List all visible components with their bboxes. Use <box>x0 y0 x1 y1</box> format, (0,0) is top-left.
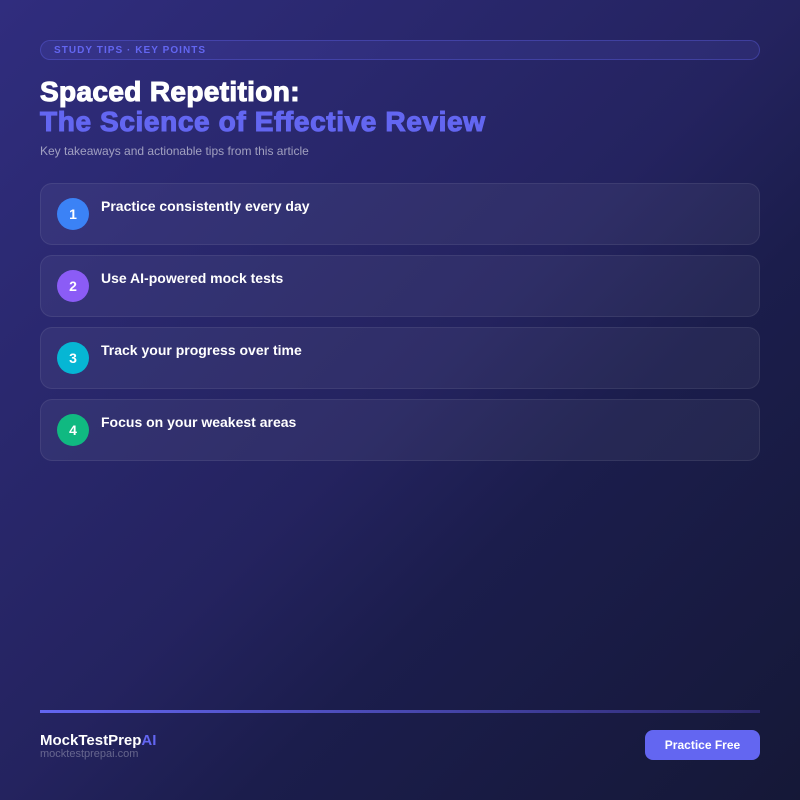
badge: study tips key points <box>40 40 760 60</box>
tip 3 text: Track your progress over time <box>101 342 302 358</box>
icon: number 2 <box>57 270 89 302</box>
button: practice free <box>645 730 760 760</box>
badge: study tips key points: STUDY TIPS · KEY POINTS <box>54 45 206 56</box>
icon: number 4: 4 <box>69 422 77 438</box>
panel: tip 4 <box>40 399 760 461</box>
brand name: MockTestPrepAI <box>40 732 156 749</box>
panel: tip 2 <box>40 255 760 317</box>
panel: tip 3 <box>40 327 760 389</box>
brand url: mocktestprepai.com <box>40 748 138 760</box>
title line 1: Spaced Repetition: <box>40 76 300 107</box>
tip 4 text: Focus on your weakest areas <box>101 414 296 430</box>
button: practice free: Practice Free <box>665 738 740 752</box>
icon: number 2: 2 <box>69 278 77 294</box>
tip 2 text: Use AI-powered mock tests <box>101 270 283 286</box>
icon: number 3 <box>57 342 89 374</box>
footer brand <box>40 732 156 760</box>
icon: number 1: 1 <box>69 206 77 222</box>
subtitle: Key takeaways and actionable tips from this article <box>40 144 309 158</box>
panel: tip 1 <box>40 183 760 245</box>
icon: number 3: 3 <box>69 350 77 366</box>
icon: number 4 <box>57 414 89 446</box>
icon: number 1 <box>57 198 89 230</box>
tip 1 text: Practice consistently every day <box>101 198 310 214</box>
title line 2: The Science of Effective Review <box>40 106 486 137</box>
